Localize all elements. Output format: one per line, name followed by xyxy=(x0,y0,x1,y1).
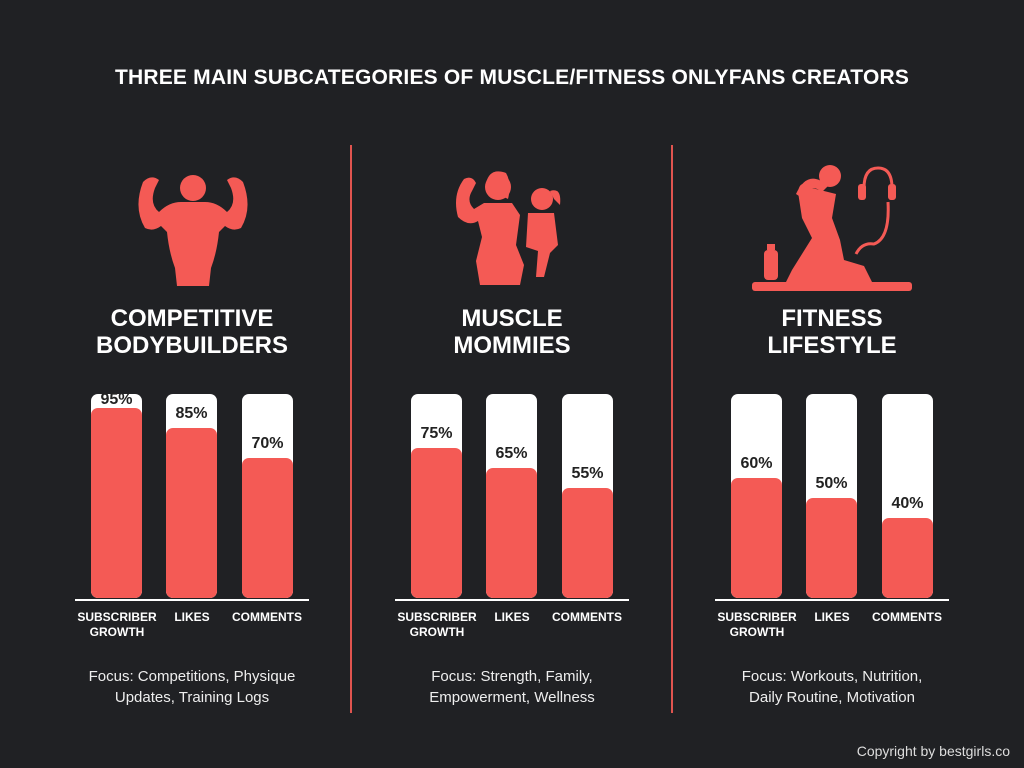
chart: fitness lifestyle: LIKES xyxy=(814,610,850,624)
icon: muscle mom xyxy=(456,171,560,285)
chart: bodybuilders: GROWTH xyxy=(90,625,144,639)
heading: competitive bodybuilders: COMPETITIVE xyxy=(111,305,273,332)
focus text: fitness lifestyle xyxy=(742,668,922,706)
chart: bodybuilders: 95% xyxy=(100,391,133,408)
focus text: bodybuilders: Updates, Training Logs xyxy=(115,689,269,706)
heading: competitive bodybuilders: BODYBUILDERS xyxy=(96,332,288,359)
chart: bodybuilders: SUBSCRIBER xyxy=(77,610,157,624)
chart: bodybuilders: 70% xyxy=(251,435,284,452)
heading: muscle mommies: MUSCLE xyxy=(461,305,563,332)
chart: muscle mommies xyxy=(395,394,629,639)
focus text: bodybuilders xyxy=(89,668,295,706)
chart: bodybuilders xyxy=(75,391,309,639)
focus text: fitness lifestyle: Daily Routine, Motivation xyxy=(749,689,915,706)
chart: bodybuilders: COMMENTS xyxy=(232,610,302,624)
focus text: bodybuilders: Focus: Competitions, Physique xyxy=(89,668,295,685)
chart: muscle mommies: SUBSCRIBER xyxy=(397,610,477,624)
focus text: muscle mommies: Focus: Strength, Family, xyxy=(431,668,593,685)
focus text: muscle mommies: Empowerment, Wellness xyxy=(429,689,595,706)
icon: bodybuilder xyxy=(138,175,248,286)
chart: fitness lifestyle: 60% xyxy=(740,455,773,472)
chart: muscle mommies: 65% xyxy=(495,445,528,462)
chart: fitness lifestyle: SUBSCRIBER xyxy=(717,610,797,624)
title: THREE MAIN SUBCATEGORIES OF MUSCLE/FITNESS ONLYFANS CREATORS xyxy=(115,66,909,89)
heading: fitness lifestyle: FITNESS xyxy=(781,305,883,332)
chart: fitness lifestyle xyxy=(715,394,949,639)
heading: fitness lifestyle: LIFESTYLE xyxy=(767,332,897,359)
chart: muscle mommies: LIKES xyxy=(494,610,530,624)
heading: fitness lifestyle xyxy=(767,305,897,359)
heading: muscle mommies: MOMMIES xyxy=(453,332,571,359)
chart: muscle mommies: 75% xyxy=(420,425,453,442)
chart: fitness lifestyle: GROWTH xyxy=(730,625,784,639)
copyright: Copyright by bestgirls.co xyxy=(857,743,1010,759)
chart: fitness lifestyle: 50% xyxy=(815,475,848,492)
chart: fitness lifestyle: 40% xyxy=(891,495,924,512)
chart: bodybuilders: LIKES xyxy=(174,610,210,624)
chart: muscle mommies: COMMENTS xyxy=(552,610,622,624)
heading: muscle mommies xyxy=(453,305,571,359)
focus text: fitness lifestyle: Focus: Workouts, Nutrition, xyxy=(742,668,922,685)
chart: fitness lifestyle: COMMENTS xyxy=(872,610,942,624)
chart: muscle mommies: GROWTH xyxy=(410,625,464,639)
heading: competitive bodybuilders xyxy=(96,305,288,359)
chart: muscle mommies: 55% xyxy=(571,465,604,482)
chart: bodybuilders: 85% xyxy=(175,405,208,422)
focus text: muscle mommies xyxy=(429,668,595,706)
icon: yoga lifestyle xyxy=(752,165,912,291)
